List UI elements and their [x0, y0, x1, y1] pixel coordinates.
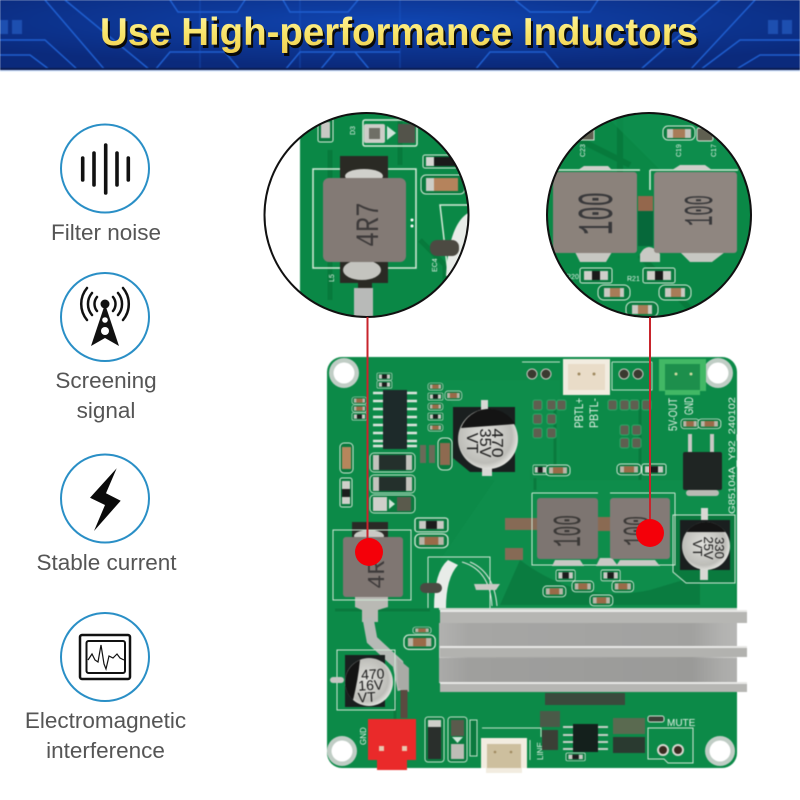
label: filter noise: Filter noise [51, 220, 161, 245]
zoom callout: 100 inductors: R21 [627, 276, 640, 283]
capacitor 330 25V: VT [690, 540, 705, 556]
label: screening signal: signal [77, 398, 135, 423]
inductor 4R7 on board [333, 522, 411, 622]
board silkscreen labels: GND [682, 397, 696, 415]
green connector [659, 359, 706, 395]
icon: sound wave [61, 124, 149, 212]
capacitor 470 35V: VT [463, 433, 480, 453]
icon: signal tower [61, 273, 149, 361]
board silkscreen labels: GND [359, 727, 368, 745]
white connector top [563, 359, 610, 395]
zoom callout: 4R7 inductor [264, 110, 475, 320]
capacitor 330 25V: 25V [701, 536, 716, 560]
op-amp IC [540, 711, 608, 761]
inductor left [553, 172, 637, 253]
zoom callout: 4R7 inductor: 4R7 [351, 202, 388, 247]
header banner [0, 0, 800, 72]
capacitor 330 25V [673, 508, 735, 583]
board silkscreen labels: G85104A_Y92_240102 [727, 397, 738, 514]
lower diodes [425, 717, 477, 762]
small parts under inductors [404, 570, 634, 649]
white connector bottom [481, 728, 541, 773]
capacitor 470 16V: VT [357, 689, 377, 705]
arrow: callout line to 100 inductor [636, 317, 664, 547]
mounting holes [327, 358, 735, 766]
zoom callout: 100 inductors: C17 [711, 144, 718, 157]
copper pour shading [440, 380, 735, 610]
label: electromagnetic interference: Electromagnetic [25, 708, 186, 733]
power inductor right: 100 [618, 516, 659, 546]
red connector [368, 719, 416, 770]
capacitor 470 35V: 35V [476, 428, 493, 458]
zoom callout: 100 inductors [547, 110, 751, 320]
heatsink [439, 608, 747, 692]
board silkscreen labels: 5V-OUT [666, 397, 680, 431]
solder pads [340, 156, 388, 180]
coil pad area [420, 557, 500, 608]
feature: filter noise [51, 124, 161, 245]
board silkscreen labels: LINE [536, 742, 545, 760]
inductor 4R7 on board: 4R [365, 560, 392, 589]
label: screening signal: Screening [55, 368, 157, 393]
zoom callout: 4R7 inductor: L5 [329, 274, 336, 282]
zoom callout: 4R7 inductor: EC4 [432, 258, 439, 272]
arrow: callout line to 4R7 inductor [355, 317, 383, 566]
outlines [547, 169, 738, 171]
capacitor 470 35V: 470 [488, 428, 505, 458]
zoom callout: 100 inductors: C23 [580, 144, 587, 157]
feature: screening signal [55, 273, 157, 423]
icon: oscilloscope monitor [61, 613, 149, 701]
top-left small components [352, 373, 462, 431]
MOSFET regulator [683, 434, 722, 496]
zoom callout: 100 inductors: C19 [676, 144, 683, 157]
capacitor pads grid [533, 400, 721, 476]
circuit board [327, 357, 747, 773]
zoom callout: 4R7 inductor: D3 [350, 126, 357, 135]
board silkscreen labels: PBTL- [587, 398, 601, 428]
solder bottom [640, 247, 660, 262]
speaker header pads [522, 362, 652, 390]
feature: electromagnetic interference [25, 613, 186, 763]
label: stable current: Stable current [36, 550, 177, 575]
capacitor 470 16V: 470 [361, 665, 385, 683]
zoom callout: 100 inductors: R20 [566, 274, 579, 281]
capacitor 470 16V: 16V [358, 676, 384, 694]
label: electromagnetic interference: interference [46, 738, 165, 763]
small caps left column [340, 438, 452, 548]
IC chip [373, 390, 417, 449]
capacitor 470 35V [453, 400, 518, 476]
diode top [363, 120, 417, 146]
small parts [580, 268, 612, 283]
small resistors by mute [613, 716, 664, 753]
zoom callout: 100 inductors: 100 [679, 195, 725, 226]
inter-inductor strip [638, 196, 653, 211]
top caps [663, 126, 695, 140]
feature: stable current [36, 454, 177, 575]
board silkscreen labels: MUTE [667, 718, 696, 729]
board silkscreen labels: PBTL+ [572, 398, 586, 428]
solder strip to capacitor [368, 618, 403, 690]
header pins under heatsink [545, 693, 625, 705]
zoom callout: 100 inductors: 100 [571, 192, 628, 235]
board silkscreen labels [359, 397, 738, 760]
mute header [648, 728, 693, 763]
power inductor middle: 100 [548, 515, 593, 547]
inductor right [654, 172, 737, 253]
capacitor 330 25V: 330 [712, 537, 727, 559]
capacitor 470 16V [330, 650, 409, 718]
power inductor right [610, 498, 670, 559]
large diodes [370, 453, 415, 513]
inductor outline [313, 169, 416, 268]
icon: lightning bolt [61, 454, 149, 542]
inductor body [323, 178, 406, 262]
title: Use High-performance Inductors [100, 11, 698, 54]
power inductor middle [505, 493, 675, 566]
